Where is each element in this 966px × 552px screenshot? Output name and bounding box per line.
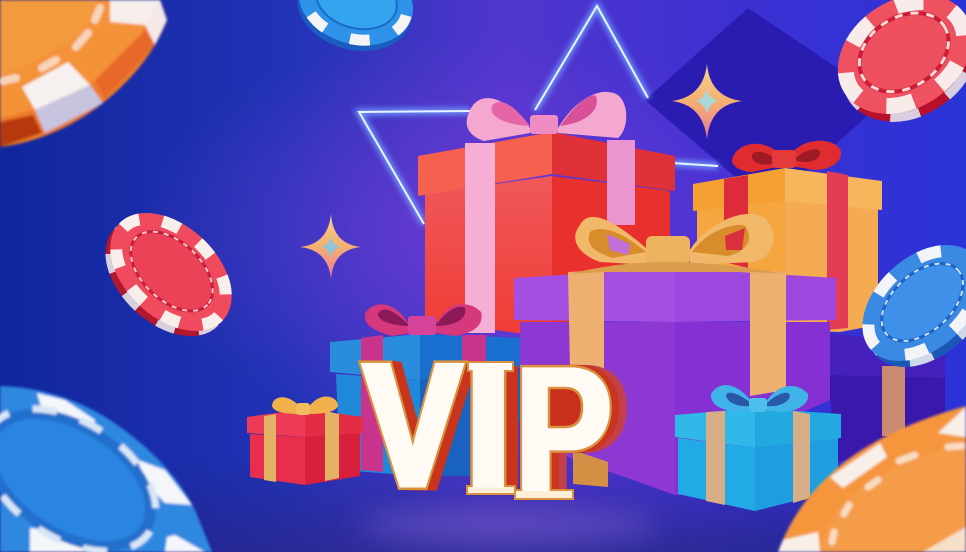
neon star outline	[359, 6, 718, 224]
letter P: P	[523, 336, 618, 524]
gift: dark purple back box	[828, 333, 945, 462]
diamond panel	[645, 8, 885, 205]
sparkle: upper right	[672, 64, 742, 139]
gift: orange box	[693, 141, 882, 332]
letter I: I	[465, 332, 512, 520]
gift: large purple box	[514, 214, 836, 495]
letter V: V	[375, 333, 470, 521]
letter I: I	[465, 332, 512, 520]
poker chip: bottom right orange	[778, 406, 966, 552]
poker chip: mid left red	[83, 190, 254, 359]
gift: large red box	[418, 92, 675, 338]
poker chip: top blue	[288, 0, 423, 63]
sparkle: left	[300, 214, 361, 279]
letter V: V	[370, 332, 465, 520]
letter P: P	[531, 336, 626, 524]
gift: blue box	[330, 304, 520, 476]
gift: cyan box	[675, 385, 841, 511]
VIP lettering	[365, 332, 626, 524]
gift: small red box	[247, 396, 363, 485]
letter P: P	[516, 336, 611, 524]
poker chip: bottom left blue	[0, 386, 212, 552]
letter V: V	[365, 332, 460, 520]
poker chip: top right red	[815, 0, 966, 146]
poker chip: top left orange	[0, 0, 167, 147]
poker chip: right blue	[840, 222, 966, 390]
P counter	[549, 388, 582, 427]
letter V: V	[365, 332, 460, 520]
letter P: P	[516, 336, 611, 524]
